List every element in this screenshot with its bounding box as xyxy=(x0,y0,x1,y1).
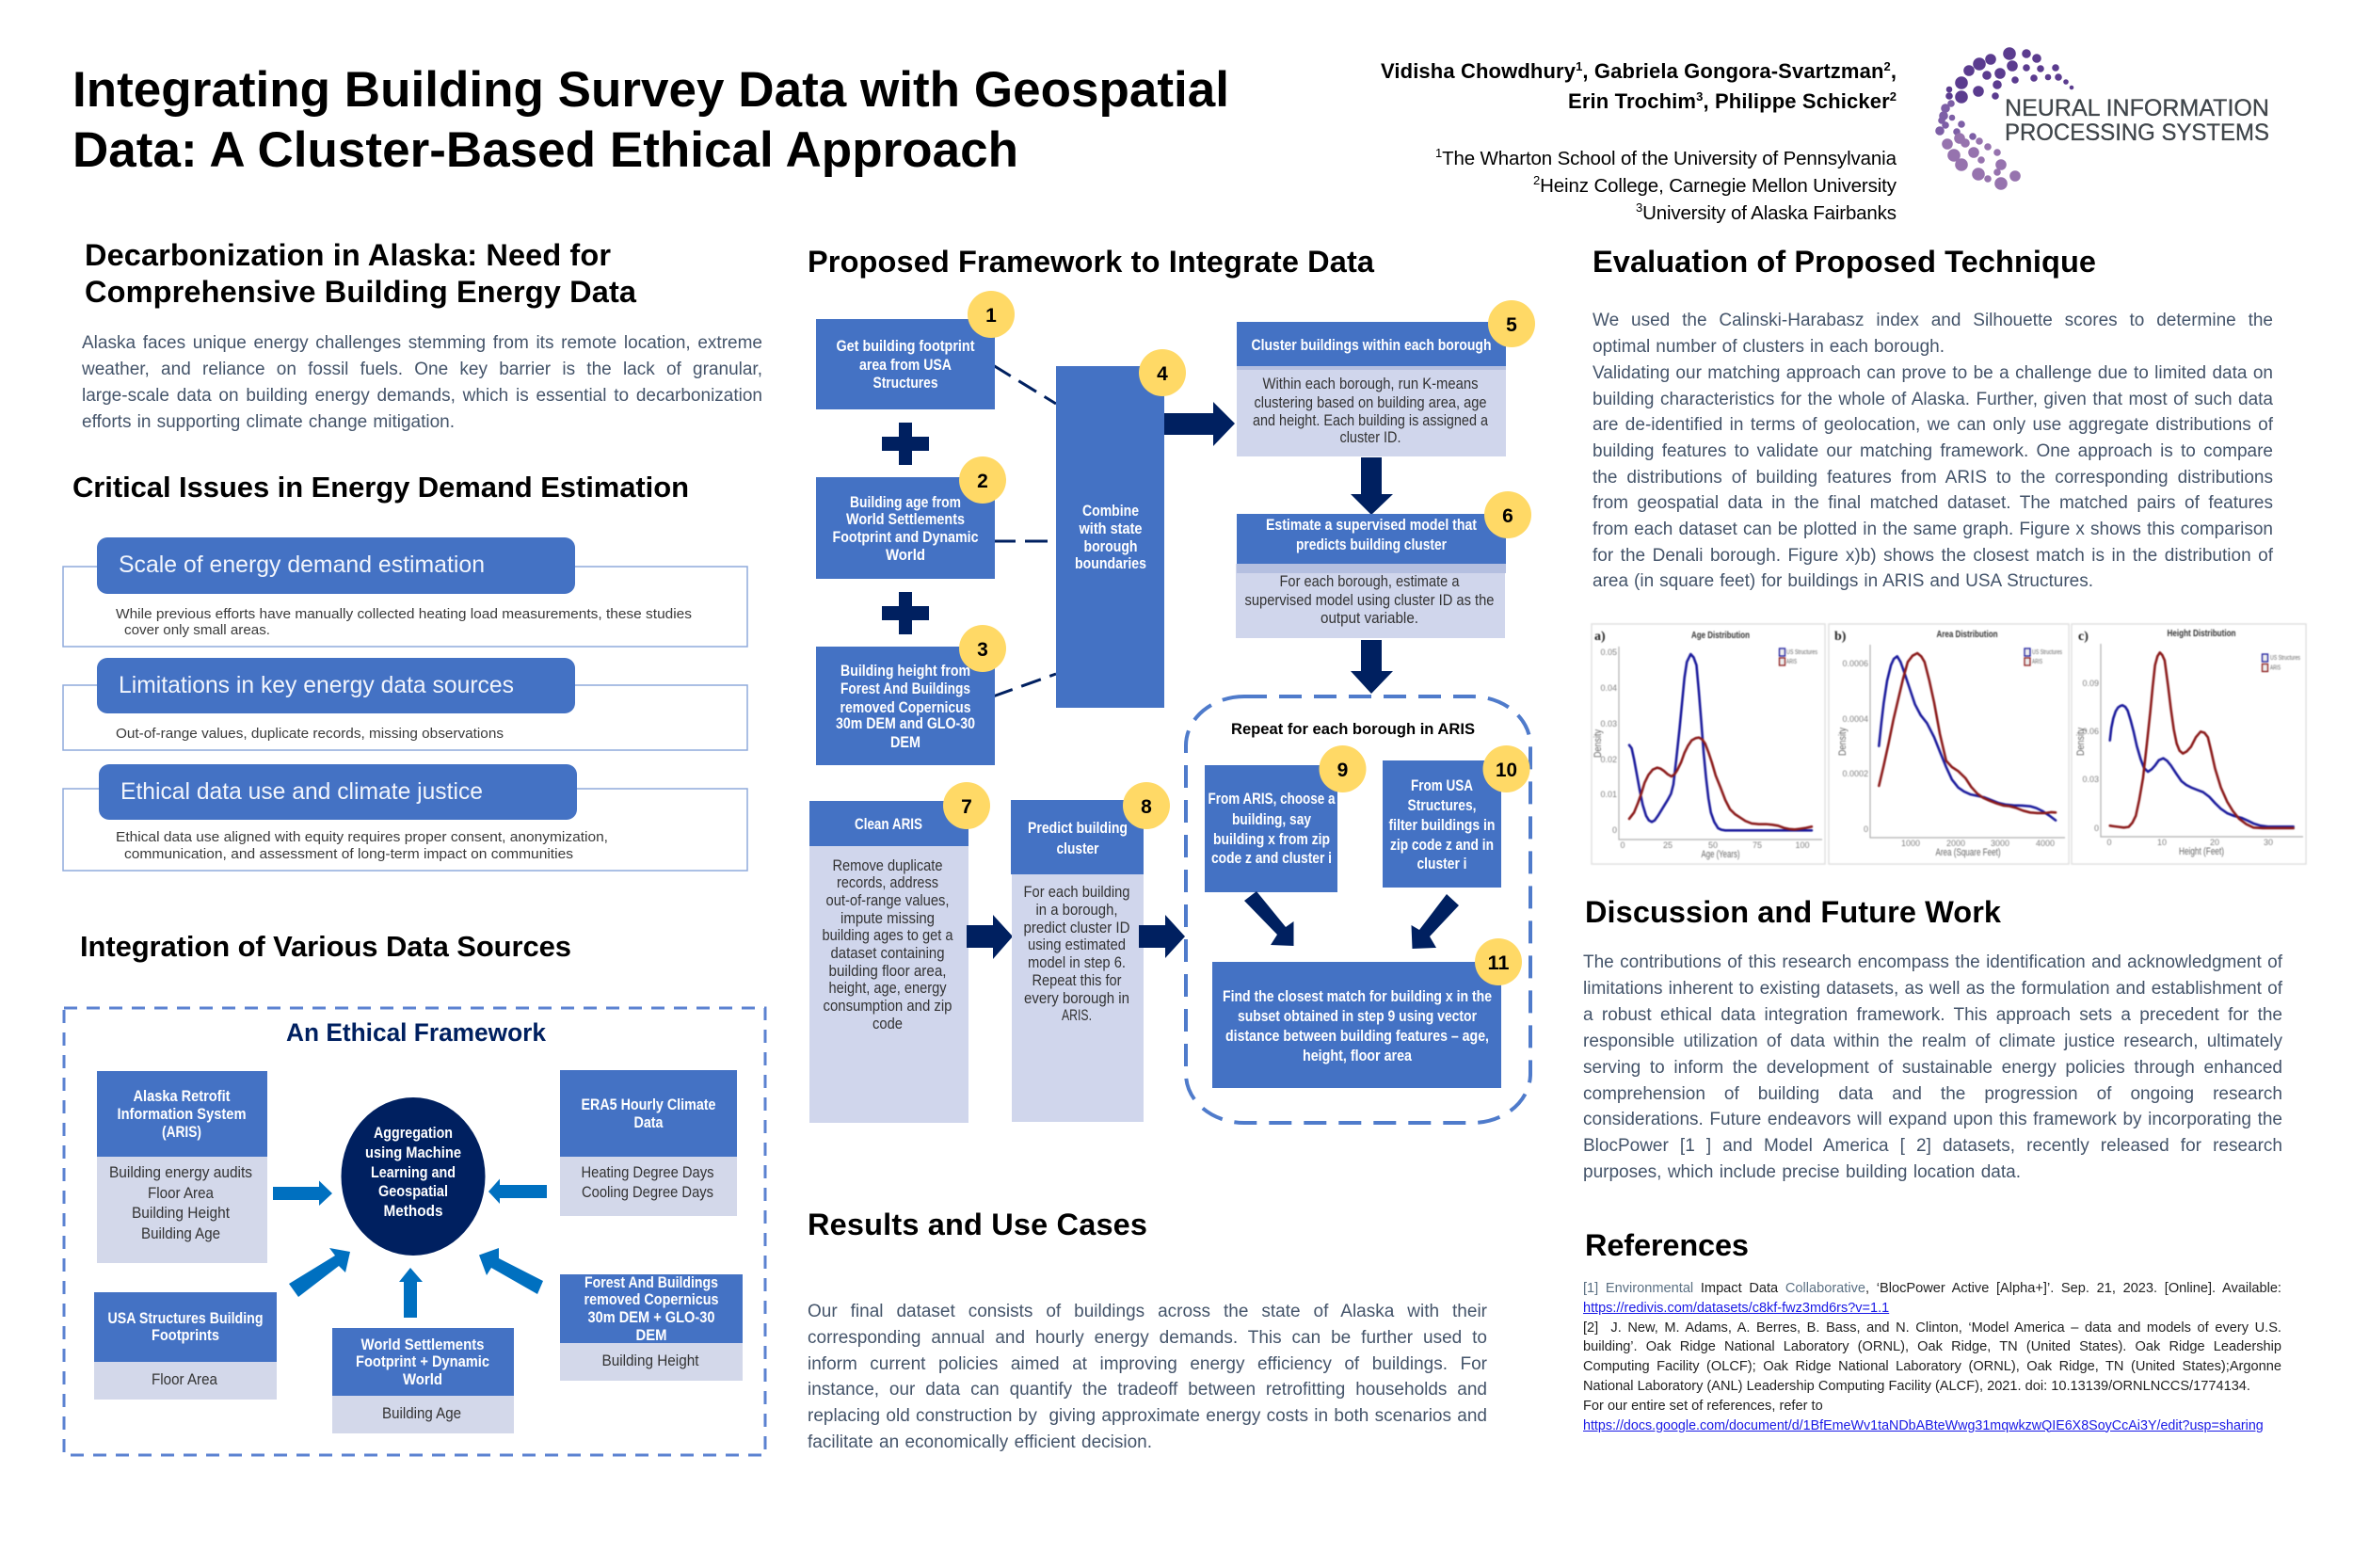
chart c: height distribution: US Structures xyxy=(2270,655,2300,662)
source: forest and buildings: 30m DEM + GLO-30 xyxy=(587,1308,715,1326)
chart a: age distribution: 0.02 xyxy=(1600,755,1617,764)
step 7: code xyxy=(872,1016,903,1032)
authors: 2 xyxy=(1884,59,1891,73)
step 2: World xyxy=(886,547,925,564)
source: forest and buildings: DEM xyxy=(636,1326,666,1344)
panel: scale of energy demand estimation xyxy=(63,537,747,647)
chart b: area distribution: Density xyxy=(1837,728,1849,756)
text: references list: building’. Oak Ridge National Laboratory (ORNL), Oak Ridge, TN (United States). Oak Ridge Leadership xyxy=(1583,1339,2281,1354)
source: world settlements: World xyxy=(403,1370,442,1388)
title: Data: A Cluster-Based Ethical Approach xyxy=(72,122,1018,178)
text: results and use cases: corresponding annual and hourly energy demands. This can be further used to xyxy=(808,1328,1487,1348)
step 8: predict cluster ID xyxy=(1024,920,1130,936)
text: results and use cases: instance, our data can quantify the tradeoff between retrofitting households and xyxy=(808,1380,1487,1400)
authors: , Gabriela Gongora-Svartzman xyxy=(1582,59,1883,83)
source: world settlements: Building Age xyxy=(382,1404,461,1422)
arrow: ERA5 to center xyxy=(488,1178,547,1204)
step 8: using estimated xyxy=(1028,936,1126,953)
chart b: area distribution: Area (Square Feet) xyxy=(1935,847,2001,858)
step 3: DEM xyxy=(890,734,920,751)
source: ERA5 xyxy=(560,1070,737,1216)
step 11: height, floor area xyxy=(1303,1048,1413,1064)
text: Alaska introduction xyxy=(82,333,762,432)
heading: proposed framework: Proposed Framework to Integrate Data xyxy=(808,245,1375,279)
title xyxy=(72,62,1229,178)
arrow: USA structures to center xyxy=(289,1248,350,1297)
text: results and use cases: Our final dataset consists of buildings across the state of Alaska with their xyxy=(808,1302,1487,1321)
text: evaluation of technique: building characteristics for the whole of Alaska. Further, given that most of such data xyxy=(1593,390,2273,408)
chart c: height distribution: 0.06 xyxy=(2082,727,2099,736)
step 7: building ages to get a xyxy=(823,927,953,944)
chart c: height distribution xyxy=(2072,624,2306,864)
source: world settlements: Footprint + Dynamic xyxy=(356,1352,489,1370)
text: discussion and future work: a robust ethical data integration framework. This approach sets a precedent for the xyxy=(1583,1005,2282,1025)
panel: limitations in key energy data sources: Limitations in key energy data sources xyxy=(119,672,514,698)
arrow: world settlements to center xyxy=(399,1268,423,1318)
step 6: predicts building cluster xyxy=(1296,536,1447,553)
step 8: in a borough, xyxy=(1035,902,1118,919)
chart b: area distribution: 1000 xyxy=(1901,839,1920,848)
source: ARIS: Building Height xyxy=(132,1204,230,1222)
source: ERA5: Heating Degree Days xyxy=(582,1163,713,1181)
source: ARIS xyxy=(97,1071,267,1263)
text: references list xyxy=(1583,1281,2281,1433)
step 10: From USA xyxy=(1411,777,1473,794)
text: references list: https://redivis.com/datasets/c8kf-fwz3md6rs?v=1.1 xyxy=(1583,1301,1889,1316)
step 9: 9 xyxy=(1337,760,1348,781)
step 2: 2 xyxy=(977,471,988,492)
step 1: 1 xyxy=(985,305,997,327)
text: discussion and future work xyxy=(1583,952,2283,1182)
text: references list: [2] J. New, M. Adams, A. Berres, B. Bass, and N. Clinton, ‘Model America – data and models of every U.S. xyxy=(1583,1320,2281,1336)
step 7: building floor area, xyxy=(828,963,947,980)
source: USA Structures: Footprints xyxy=(152,1326,219,1344)
step 6: Estimate a supervised model that xyxy=(1266,517,1477,534)
chart a: age distribution: 0 xyxy=(1612,825,1617,835)
text: Alaska introduction: Alaska faces unique energy challenges stemming from its remote location, extreme xyxy=(82,333,762,353)
step 7 xyxy=(809,782,990,1123)
logo: neural information processing systems xyxy=(1936,48,2269,189)
step 4: with state xyxy=(1079,520,1143,537)
source: ERA5: Data xyxy=(634,1113,664,1131)
heading: discussion: Discussion and Future Work xyxy=(1585,895,2002,929)
source: forest and buildings: Forest And Buildings xyxy=(584,1273,718,1291)
chart c: height distribution: 10 xyxy=(2157,838,2167,847)
step 8: every borough in xyxy=(1024,990,1129,1007)
step 4: borough xyxy=(1084,538,1137,555)
step 10 xyxy=(1383,745,1530,888)
heading: decarbonization in Alaska: Comprehensive Building Energy Data xyxy=(85,275,637,309)
text: references list: National Laboratory (ANL) Leadership Computing Facility (ALCF), 2021. doi: 10.13139/ORNLNCCS/1774134. xyxy=(1583,1379,2250,1394)
chart a: age distribution: Age Distribution xyxy=(1691,631,1750,641)
step 7: 7 xyxy=(961,796,972,818)
text: references list: Computing Facility (OLCF); Oak Ridge National Laboratory (ORNL), Oak Ridge, TN (United States);Argonne xyxy=(1583,1359,2281,1374)
chart a: age distribution: 100 xyxy=(1795,840,1810,850)
step 11: distance between building features – age, xyxy=(1225,1028,1489,1045)
step 9: code z and cluster i xyxy=(1211,850,1332,867)
text: evaluation of technique: Validating our matching approach can prove to be a challenge due to limited data on xyxy=(1593,363,2273,383)
text: discussion and future work: The contributions of this research encompass the identification and acknowledgment of xyxy=(1583,952,2282,972)
authors: , xyxy=(1891,59,1897,83)
text: evaluation of technique: from geospatial data in the final matched dataset. The matched pairs of features xyxy=(1593,493,2273,513)
chart a: age distribution: a) xyxy=(1594,630,1606,644)
chart a: age distribution: 0.04 xyxy=(1600,683,1617,693)
chart b: area distribution: US Structures xyxy=(2032,649,2062,656)
text: evaluation of technique xyxy=(1593,311,2274,591)
step 7: out-of-range values, xyxy=(826,892,949,909)
step 8 xyxy=(1011,782,1170,1122)
source: ERA5: ERA5 Hourly Climate xyxy=(582,1096,715,1113)
step 1 xyxy=(816,291,1015,409)
icon: plus xyxy=(882,423,929,465)
chart b: area distribution: ARIS xyxy=(2032,659,2042,665)
arrow: step 7 to step 8 xyxy=(967,915,1013,959)
text: evaluation of technique: area (in square feet) for buildings in ARIS and USA Structures. xyxy=(1593,571,2093,591)
step 11: subset obtained in step 9 using vector xyxy=(1238,1008,1477,1025)
logo: neural information processing systems: PROCESSING SYSTEMS xyxy=(2005,120,2269,146)
text: evaluation of technique: for the Denali borough. Figure x)b) shows the closest match is in the distribution of xyxy=(1593,546,2273,566)
center: aggregation ellipse: Aggregation xyxy=(374,1124,453,1142)
step 6 xyxy=(1236,491,1531,638)
source: ERA5: Cooling Degree Days xyxy=(582,1183,713,1201)
step 10: filter buildings in xyxy=(1389,817,1495,834)
text: Alaska introduction: large-scale data on building energy demands, which is essential to decarbonization xyxy=(82,386,762,406)
source: world settlements xyxy=(332,1328,514,1433)
heading: references: References xyxy=(1585,1228,1749,1262)
heading: decarbonization in Alaska: Decarbonization in Alaska: Need for xyxy=(85,238,611,272)
step 2: Footprint and Dynamic xyxy=(832,529,979,546)
arrow: step 4 to step 5 xyxy=(1164,402,1235,446)
step 3: removed Copernicus xyxy=(840,699,971,716)
source: forest and buildings: removed Copernicus xyxy=(584,1290,719,1308)
step 7: records, address xyxy=(837,874,938,891)
authors: 3 xyxy=(1696,89,1703,104)
arrow: forest and buildings to center xyxy=(479,1248,543,1294)
connector: step 2 to step 4 xyxy=(993,540,1050,542)
text: evaluation of technique: the distributions of building features from ARIS to the corresponding distributions xyxy=(1593,468,2273,488)
connector: step 1 to step 4 xyxy=(993,365,1056,404)
framework heading: An Ethical Framework xyxy=(286,1018,547,1047)
chart b: area distribution: Area Distribution xyxy=(1937,630,1997,640)
chart a: age distribution: 50 xyxy=(1708,840,1718,850)
step 6: output variable. xyxy=(1321,610,1418,627)
step 9: building x from zip xyxy=(1213,831,1330,848)
panel: ethical data use and climate justice: Ethical data use and climate justice xyxy=(120,778,483,805)
authors: 1 xyxy=(1576,59,1582,73)
step 8: cluster xyxy=(1056,840,1099,857)
step 5: Within each borough, run K-means xyxy=(1263,376,1478,392)
chart a: age distribution xyxy=(1592,624,1825,864)
step 1: Structures xyxy=(873,375,937,392)
step 3: Forest And Buildings xyxy=(840,680,970,697)
chart a: age distribution: 0.03 xyxy=(1600,719,1617,728)
panel: limitations in key energy data sources xyxy=(63,658,747,750)
chart c: height distribution: c) xyxy=(2078,630,2089,644)
chart a: age distribution: Density xyxy=(1593,729,1604,758)
chart b: area distribution: 0 xyxy=(1864,824,1868,834)
panel: scale of energy demand estimation: cover only small areas. xyxy=(124,622,270,638)
step 1: Get building footprint xyxy=(836,338,975,355)
step 8: Predict building xyxy=(1028,820,1128,837)
step 5: clustering based on building area, age xyxy=(1254,394,1487,411)
source: ARIS: Building energy audits xyxy=(109,1163,252,1181)
source: forest and buildings: Building Height xyxy=(602,1352,699,1369)
panel: limitations in key energy data sources: Out-of-range values, duplicate records, missing observations xyxy=(116,726,504,742)
arrow: step 10 to step 11 xyxy=(1412,894,1459,949)
step 9 xyxy=(1205,745,1367,892)
step 9: From ARIS, choose a xyxy=(1209,791,1336,808)
arrow: ARIS to center xyxy=(273,1180,332,1206)
authors: Vidisha Chowdhury xyxy=(1381,59,1576,83)
text: discussion and future work: BlocPower [1 ] and Model America [ 2] datasets, recently released for research xyxy=(1583,1136,2282,1156)
text: discussion and future work: responsible utilization of data within the realm of climate justice research, ultimately xyxy=(1583,1032,2282,1051)
step 7: dataset containing xyxy=(830,945,945,962)
step 2: World Settlements xyxy=(846,511,965,528)
panel: ethical data use and climate justice: Ethical data use aligned with equity requires proper consent, anonymization, xyxy=(116,829,608,845)
source: USA Structures: Floor Area xyxy=(152,1370,217,1388)
chart c: height distribution: 0.03 xyxy=(2082,775,2099,784)
text: results and use cases: facilitate an economically efficient decision. xyxy=(808,1432,1152,1452)
affiliations: 1 xyxy=(1435,146,1442,160)
arrow: step 9 to step 11 xyxy=(1244,891,1293,946)
step 8: 8 xyxy=(1141,796,1152,818)
chart b: area distribution xyxy=(1829,624,2069,864)
center: aggregation ellipse: Geospatial xyxy=(378,1182,448,1200)
heading: decarbonization in Alaska xyxy=(85,238,637,309)
text: Alaska introduction: efforts in supporting climate change mitigation. xyxy=(82,412,455,432)
chart c: height distribution: Density xyxy=(2075,728,2087,756)
center: aggregation ellipse: using Machine xyxy=(365,1144,461,1161)
chart a: age distribution: 0 xyxy=(1620,840,1625,850)
text: discussion and future work: considerations. Future endeavors will expand upon this framework by incorporating the xyxy=(1583,1110,2282,1129)
center: aggregation ellipse: Learning and xyxy=(371,1163,456,1181)
step 9: building, say xyxy=(1232,811,1312,828)
chart c: height distribution: ARIS xyxy=(2270,664,2281,672)
step 10: cluster i xyxy=(1417,856,1466,872)
chart a: age distribution: Age (Years) xyxy=(1702,849,1739,860)
step 7: Remove duplicate xyxy=(832,857,943,874)
arrow: step 5 to step 6 xyxy=(1351,457,1393,515)
source: world settlements: World Settlements xyxy=(361,1336,484,1353)
step 4: Combine xyxy=(1082,503,1139,520)
step 8: ARIS. xyxy=(1062,1007,1092,1024)
source: ARIS: (ARIS) xyxy=(162,1123,201,1141)
affiliations: University of Alaska Fairbanks xyxy=(1642,202,1897,224)
text: results and use cases: inform current policies aimed at improving energy efficiency of buildings. For xyxy=(808,1354,1487,1374)
source: forest and buildings xyxy=(560,1273,743,1381)
step 11 xyxy=(1212,938,1522,1088)
authors: , Philippe Schicker xyxy=(1703,89,1890,113)
source: USA Structures: USA Structures Building xyxy=(107,1309,264,1327)
source: USA Structures xyxy=(94,1292,277,1400)
chart b: area distribution: 0.0006 xyxy=(1842,659,1868,668)
step 3: 30m DEM and GLO-30 xyxy=(836,715,975,732)
text: evaluation of technique: from each dataset can be plotted in the same graph. Figure x shows this comparison xyxy=(1593,520,2273,539)
step 5: cluster ID. xyxy=(1340,429,1401,446)
arrow: step 8 to repeat loop xyxy=(1139,915,1185,958)
chart b: area distribution: 4000 xyxy=(2036,839,2055,848)
chart a: age distribution: 75 xyxy=(1753,840,1762,850)
step 7: impute missing xyxy=(840,910,935,927)
chart c: height distribution: 0 xyxy=(2094,824,2099,833)
step 4: boundaries xyxy=(1075,555,1146,572)
text: Alaska introduction: weather, and reliance on fossil fuels. One key barrier is the lack of granular, xyxy=(82,360,762,379)
repeat loop frame xyxy=(1186,696,1530,1123)
text: discussion and future work: serving to inform the development of sustainable energy policies through enhanced xyxy=(1583,1058,2282,1078)
affiliations: 2 xyxy=(1533,173,1540,187)
source: ARIS: Floor Area xyxy=(148,1184,214,1202)
text: discussion and future work: purposes, which include precise building location data. xyxy=(1583,1162,2021,1182)
text: evaluation of technique: are de-identified in terms of geolocation, we can only use aggregate distributions of xyxy=(1593,415,2273,435)
text: references list: https://docs.google.com/document/d/1BfEmeWv1taNDbABteWwg31mqwkzwQIE6X8SoyCcAi3Y/edit?usp=sharing xyxy=(1583,1418,2264,1433)
affiliations: The Wharton School of the University of Pennsylvania xyxy=(1442,148,1897,169)
affiliations xyxy=(1435,146,1897,224)
panel: ethical data use and climate justice xyxy=(63,764,747,871)
source: ARIS: Alaska Retrofit xyxy=(134,1087,231,1105)
heading: evaluation: Evaluation of Proposed Technique xyxy=(1593,245,2096,279)
text: discussion and future work: limitations inherent to existing datasets, as well as the formulation and establishment of xyxy=(1583,979,2282,999)
chart b: area distribution: b) xyxy=(1834,630,1847,644)
step 7: consumption and zip xyxy=(823,998,952,1015)
chart c: height distribution: 30 xyxy=(2264,838,2273,847)
text: evaluation of technique: optimal number of clusters in each borough. xyxy=(1593,337,1945,357)
repeat loop frame: Repeat for each borough in ARIS xyxy=(1231,720,1475,738)
chart c: height distribution: Height (Feet) xyxy=(2179,846,2224,857)
heading: critical issues: Critical Issues in Energy Demand Estimation xyxy=(72,471,689,504)
center: aggregation ellipse: Methods xyxy=(384,1202,442,1220)
step 10: 10 xyxy=(1496,760,1517,781)
step 2: Building age from xyxy=(850,494,961,511)
step 6: supervised model using cluster ID as the xyxy=(1244,592,1495,609)
chart c: height distribution: 20 xyxy=(2210,838,2219,847)
step 6: For each borough, estimate a xyxy=(1280,573,1460,590)
heading: integration of data sources: Integration of Various Data Sources xyxy=(80,930,571,963)
authors: 2 xyxy=(1890,89,1897,104)
chart b: area distribution: 2000 xyxy=(1946,839,1965,848)
step 5 xyxy=(1237,300,1535,456)
chart c: height distribution: 0.09 xyxy=(2082,679,2099,688)
chart b: area distribution: 0.0002 xyxy=(1842,769,1868,778)
step 6: 6 xyxy=(1502,505,1513,527)
step 5: 5 xyxy=(1506,314,1517,336)
authors xyxy=(1381,59,1897,113)
step 10: Structures, xyxy=(1408,797,1476,814)
text: evaluation of technique: building features to validate our matching framework. One approach is to compare xyxy=(1593,441,2273,461)
step 1: area from USA xyxy=(859,357,952,374)
step 2 xyxy=(816,456,1006,579)
title: Integrating Building Survey Data with Geospatial xyxy=(72,62,1229,118)
text: results and use cases: replacing old construction by giving approximate energy costs in both scenarios and xyxy=(808,1406,1487,1426)
chart a: age distribution: ARIS xyxy=(1786,659,1797,665)
panel: an ethical framework xyxy=(64,1008,765,1455)
affiliations: Heinz College, Carnegie Mellon University xyxy=(1540,175,1897,197)
step 3: 3 xyxy=(977,639,988,661)
panel: ethical data use and climate justice: communication, and assessment of long-term impact on communities xyxy=(124,846,573,862)
affiliations: 3 xyxy=(1636,200,1642,215)
step 7: height, age, energy xyxy=(828,980,947,997)
step 8: For each building xyxy=(1024,884,1129,901)
step 8: Repeat this for xyxy=(1032,972,1122,989)
chart a: age distribution: 0.01 xyxy=(1600,790,1617,799)
arrow: step 6 to repeat loop xyxy=(1351,640,1393,694)
step 10: zip code z and in xyxy=(1390,837,1494,854)
panel: scale of energy demand estimation: Scale of energy demand estimation xyxy=(119,552,485,578)
icon: plus xyxy=(882,592,929,634)
source: ARIS: Information System xyxy=(117,1105,247,1123)
chart c: height distribution: Height Distribution xyxy=(2167,629,2236,639)
chart a: age distribution: US Structures xyxy=(1786,649,1817,656)
heading: results and use cases: Results and Use Cases xyxy=(808,1208,1147,1241)
authors: Erin Trochim xyxy=(1568,89,1696,113)
step 3: Building height from xyxy=(840,663,970,680)
text: results and use cases xyxy=(808,1302,1487,1452)
text: references list: For our entire set of references, refer to xyxy=(1583,1399,1823,1414)
center: aggregation ellipse xyxy=(341,1097,486,1256)
chart a: age distribution: 25 xyxy=(1663,840,1673,850)
text: discussion and future work: comprehension of building data and the progression of ongoing research xyxy=(1583,1084,2282,1104)
step 3 xyxy=(816,625,1006,765)
step 11: 11 xyxy=(1487,952,1510,974)
step 11: Find the closest match for building x in the xyxy=(1223,988,1492,1005)
logo: neural information processing systems: NEURAL INFORMATION xyxy=(2005,95,2269,121)
step 8: model in step 6. xyxy=(1028,954,1126,971)
connector: step 3 to step 4 xyxy=(993,674,1056,696)
step 7: Clean ARIS xyxy=(855,816,922,833)
chart b: area distribution: 3000 xyxy=(1991,839,2009,848)
step 5: Cluster buildings within each borough xyxy=(1252,337,1491,354)
panel: scale of energy demand estimation: While previous efforts have manually collected heating load measurements, these studies xyxy=(116,606,692,622)
step 5: and height. Each building is assigned a xyxy=(1253,412,1489,429)
text: evaluation of technique: We used the Calinski-Harabasz index and Silhouette scores to determine the xyxy=(1593,311,2273,330)
chart c: height distribution: 0 xyxy=(2106,838,2112,847)
chart b: area distribution: 0.0004 xyxy=(1842,714,1868,724)
chart a: age distribution: 0.05 xyxy=(1600,648,1617,657)
text: references list: [1] Environmental Impact Data Collaborative, ‘BlocPower Active [Alpha+]’. Sep. 21, 2023. [Online]. Available: xyxy=(1583,1281,2281,1296)
step 4 xyxy=(1056,349,1186,708)
source: ARIS: Building Age xyxy=(141,1224,220,1242)
step 4: 4 xyxy=(1157,363,1168,385)
